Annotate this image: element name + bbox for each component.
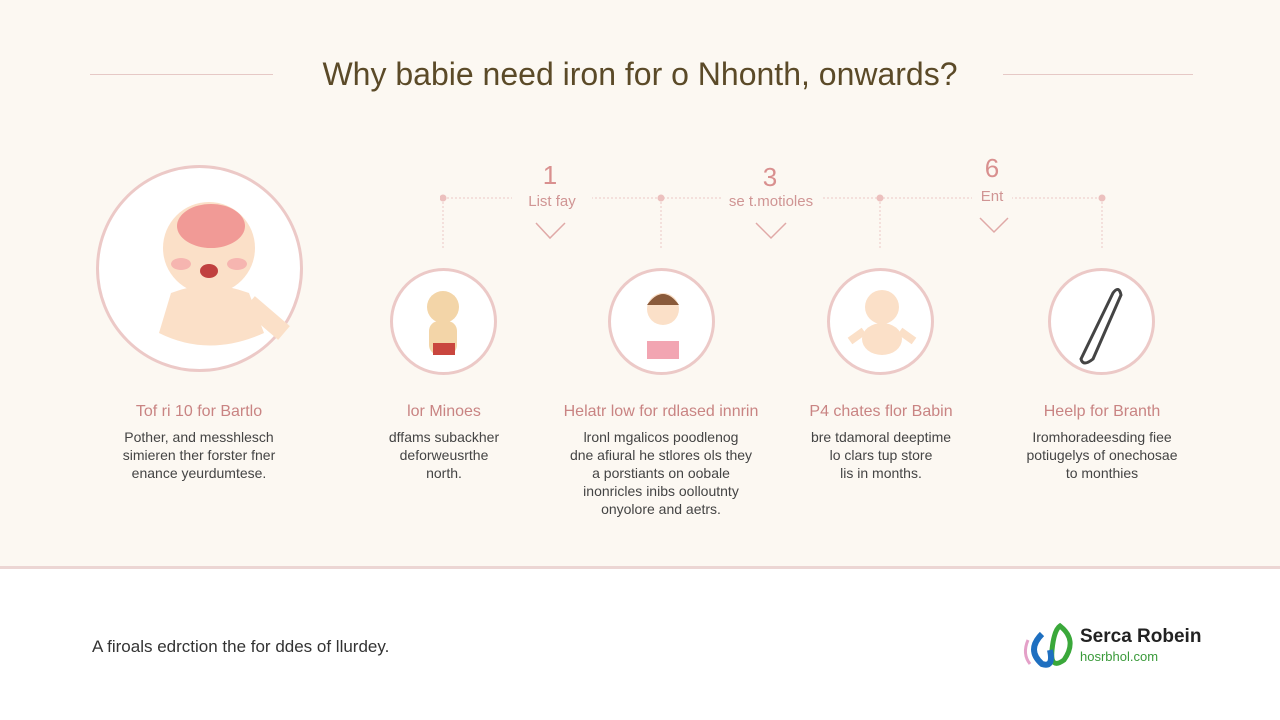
icon: baby brain (96, 165, 303, 372)
text: Pother, and messhlesch (124, 429, 274, 445)
icon 1 (390, 268, 497, 375)
text: north. (426, 465, 462, 481)
timeline: se t.motioles (729, 193, 813, 210)
logo (1024, 622, 1201, 668)
title: Why babie need iron for o Nhonth, onwards? (322, 56, 958, 92)
text: lor Minoes (407, 403, 481, 420)
timeline: 3 (763, 162, 777, 192)
text: onyolore and aetrs. (601, 501, 721, 517)
timeline: 6 (985, 153, 999, 183)
text: lo clars tup store (830, 447, 932, 463)
text: a porstiants on oobale (592, 465, 730, 481)
text: potiugelys of onechosae (1026, 447, 1178, 463)
logo: Serca Robein (1080, 626, 1201, 647)
text: Iromhoradeesding fiee (1032, 429, 1172, 445)
footer text: A firoals edrction the for ddes of llurdey. (92, 637, 389, 656)
text: to monthies (1066, 465, 1138, 481)
text: dne afiural he stlores ols they (570, 447, 752, 463)
text: Helatr low for rdlased innrin (564, 403, 758, 420)
text columns: Tof ri 10 for Bartlo (136, 403, 262, 420)
timeline (440, 153, 1106, 248)
icon 3 (827, 268, 934, 375)
timeline: Ent (981, 188, 1003, 205)
icon 4 (1048, 268, 1155, 375)
text: P4 chates flor Babin (809, 403, 953, 420)
text: lronl mgalicos poodlenog (584, 429, 738, 445)
logo: hosrbhol.com (1080, 649, 1158, 664)
text: Heelp for Branth (1044, 403, 1160, 420)
icon 2 (608, 268, 715, 375)
timeline: List fay (528, 193, 576, 210)
timeline: 1 (543, 160, 557, 190)
text: simieren ther forster fner (123, 447, 275, 463)
text: enance yeurdumtese. (132, 465, 266, 481)
text: inonricles inibs oolloutnty (583, 483, 739, 499)
text: deforweusrthe (400, 447, 488, 463)
text: dffams subackher (389, 429, 499, 445)
text: bre tdamoral deeptime (811, 429, 951, 445)
text: lis in months. (840, 465, 922, 481)
